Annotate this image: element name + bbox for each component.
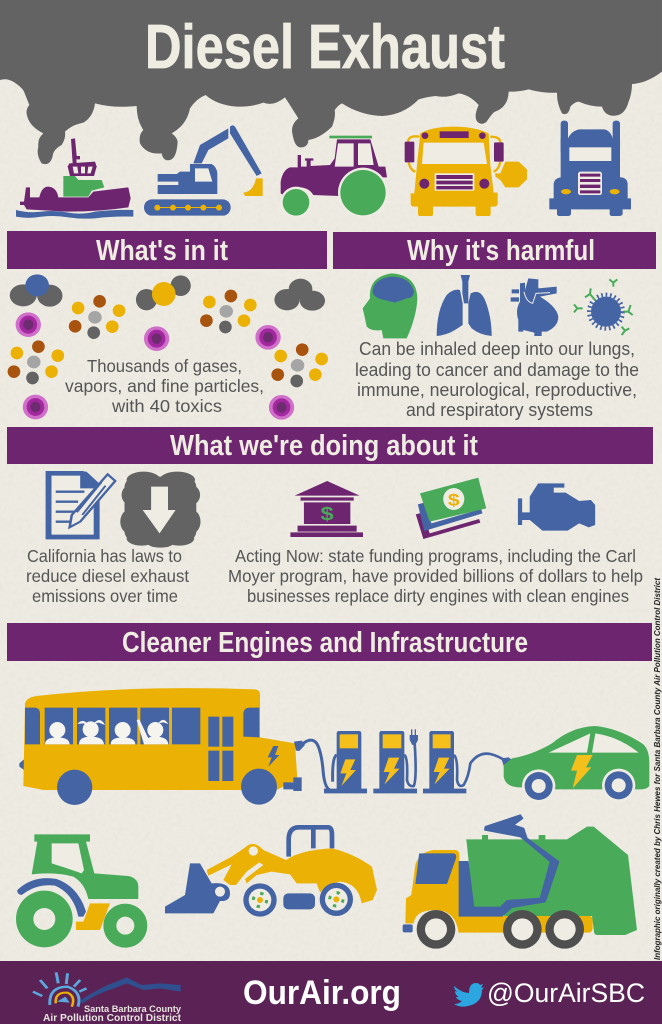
icon: engine <box>518 483 595 531</box>
logo <box>33 972 181 1024</box>
text: california laws <box>26 546 189 606</box>
panel: what we're doing heading: What we're doing about it <box>170 430 478 462</box>
credit vertical text: Infographic originally created by Chris Hewes for Santa Barbara County Air Pollution Control District <box>653 578 662 960</box>
text: why it's harmful: immune, neurological, reproductive, <box>357 380 637 400</box>
panel: cleaner engines heading <box>7 623 652 661</box>
icon: semi truck <box>549 121 631 216</box>
text: acting now <box>228 546 643 606</box>
icon: green tractor <box>16 834 147 948</box>
icon: bank <box>290 481 363 537</box>
molecule group 1 <box>10 274 62 307</box>
text: acting now: businesses replace dirty engines with clean engines <box>247 586 629 606</box>
icon: cloud with down arrow <box>120 472 200 548</box>
icon: lungs <box>437 275 492 336</box>
footer <box>0 961 662 1024</box>
action icons <box>49 472 595 548</box>
icon: virus germ <box>574 279 633 335</box>
vehicle row <box>16 121 631 219</box>
text: acting now: Acting Now: state funding programs, including the Carl <box>235 546 636 566</box>
electric school bus <box>19 688 302 805</box>
molecule group 2 <box>136 275 191 310</box>
icon: excavator <box>144 125 263 216</box>
icon: tractor <box>280 136 388 218</box>
text: what's in it: vapors, and fine particles, <box>65 376 264 396</box>
icon: bank: $ <box>321 503 334 524</box>
panel: why it's harmful heading: Why it's harmful <box>407 235 595 267</box>
twitter handle: @OurAirSBC <box>487 978 645 1008</box>
icon: school bus front <box>405 127 527 216</box>
panel: what's in it heading: What's in it <box>96 235 228 267</box>
panel: what we're doing heading <box>7 427 653 464</box>
text: what's in it: with 40 toxics <box>111 396 222 416</box>
particles and molecules illustration <box>8 274 328 420</box>
icon: twitter bird <box>454 983 484 1007</box>
text: what's in it: Thousands of gases, <box>87 356 242 376</box>
charging stations and hoses <box>294 729 512 793</box>
icon: garbage truck <box>403 815 637 949</box>
icon: stack of money: $ <box>448 492 460 510</box>
website: OurAir.org <box>243 974 401 1012</box>
logo: Santa Barbara County <box>84 1004 181 1014</box>
electric car <box>504 726 649 803</box>
text: what's in it <box>65 356 264 416</box>
logo: Air Pollution Control District <box>43 1012 181 1024</box>
icon: document and pencil <box>49 472 115 537</box>
icon: wheel loader <box>165 827 377 917</box>
title: Diesel Exhaust <box>145 13 505 82</box>
text: california laws: emissions over time <box>32 586 178 606</box>
panel: cleaner engines heading: Cleaner Engines and Infrastructure <box>122 627 528 659</box>
text: why it's harmful: leading to cancer and damage to the <box>355 360 639 380</box>
exhaust cloud banner <box>0 0 662 164</box>
text: why it's harmful: and respiratory systems <box>406 400 593 420</box>
pink particles <box>16 312 294 420</box>
text: why it's harmful <box>355 339 639 420</box>
text: california laws: California has laws to <box>27 546 182 566</box>
panel: why it's harmful heading <box>333 232 656 269</box>
health icons <box>363 273 633 338</box>
text: why it's harmful: Can be inhaled deep into our lungs, <box>359 339 635 359</box>
panel: what's in it heading <box>7 231 327 269</box>
icon: stack of money <box>416 478 486 539</box>
icon: tugboat <box>16 138 133 219</box>
molecule group 3 <box>274 279 325 311</box>
children in windows <box>45 719 168 744</box>
icon: heart <box>511 278 558 336</box>
text: acting now: Moyer program, have provided billions of dollars to help <box>228 566 643 586</box>
icon: head with brain <box>363 273 417 338</box>
text: california laws: reduce diesel exhaust <box>26 566 189 586</box>
particle clusters <box>8 290 328 387</box>
